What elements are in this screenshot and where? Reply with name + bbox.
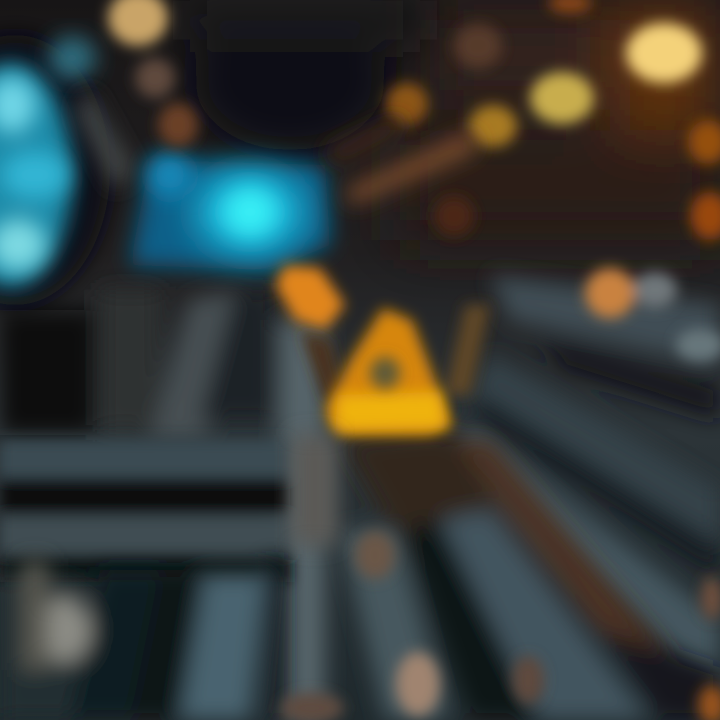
brown strut behind triangle bbox=[300, 305, 490, 400]
warning triangle bbox=[325, 308, 452, 435]
bottom left rails bbox=[0, 560, 285, 720]
warm bokeh lights bbox=[108, 0, 720, 361]
diagonal amber light streak bbox=[325, 115, 478, 205]
bottom beige highlights bbox=[280, 531, 720, 720]
central rust conveyor and bottom rails bbox=[340, 430, 720, 720]
top right warm haze bbox=[400, 0, 720, 240]
right side grey rails bbox=[450, 275, 720, 690]
orange warning knob bbox=[275, 265, 345, 330]
left blue gauge ring bbox=[0, 35, 135, 305]
left dark column bbox=[0, 290, 325, 720]
central grey post bbox=[292, 435, 337, 545]
top dark machine housing bbox=[190, 0, 420, 150]
left horizontal bars bbox=[0, 440, 290, 582]
central cyan glow bbox=[130, 153, 330, 270]
